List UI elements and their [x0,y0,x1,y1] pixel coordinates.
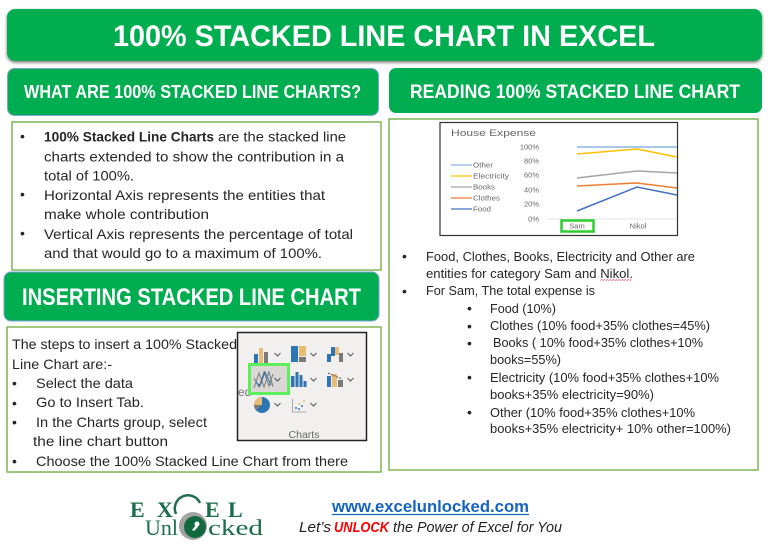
legend: Clothes [473,194,500,202]
tagline: Let’s [299,519,332,536]
definition bullets: • [20,128,25,144]
ribbon group label: Charts [289,429,319,441]
icon: combo chart [327,373,343,387]
step bullets: • [12,414,17,430]
step bullets: • [12,395,17,411]
ribbon screenshot: charts group [238,332,366,441]
tagline [299,519,563,536]
percent axis: 20% [524,200,539,208]
steps text [12,336,348,469]
reading text: Other (10% food+35% clothes+10% [490,405,695,420]
logo word: Unlocked: Unl [145,515,178,540]
definition text: total of 100%. [44,168,134,184]
chart: house expense [440,122,678,236]
reading text [426,249,731,436]
legend: Books [473,182,495,192]
legend: Electricity [473,172,509,180]
definition bullets: • [20,225,25,241]
reading text: Food (10%) [490,301,556,316]
icon: scatter chart [292,399,306,412]
heading: what are 100% stacked line charts [8,68,378,116]
definition text: Vertical Axis represents the percentage of total [44,226,353,242]
reading text: Books ( 10% food+35% clothes+10% [493,335,703,350]
chart title: House Expense [451,128,536,139]
definition bullets [20,128,25,241]
panel: reading the chart [389,119,758,470]
reading text: books+35% electricity=90%) [490,387,654,402]
step bullets: • [12,453,17,469]
heading: inserting stacked line chart: INSERTING STACKED LINE CHART [22,284,361,311]
category labels: Nikol [630,222,647,230]
steps text: Go to Insert Tab. [36,394,144,410]
percent axis [520,142,539,224]
definition text: charts extended to show the contribution in a [44,148,344,164]
steps text: Select the data [36,375,133,391]
definition text: Horizontal Axis represents the entities that [44,187,325,203]
logo word: EXCEL: L [228,497,243,522]
reading text: For Sam, The total expense is [426,283,595,298]
steps text: Choose the 100% Stacked Line Chart from there [36,453,348,469]
reading bullets: • [402,248,407,264]
icon: treemap [291,346,306,362]
steps text: Line Chart are:- [12,356,112,372]
icon: column chart [254,348,268,363]
website link: www.excelunlocked.com [331,497,529,516]
logo word: EXCEL: X [157,497,173,522]
icon: bar chart [291,372,306,387]
definition text: are the stacked line [218,128,346,144]
icon: pie chart [254,397,270,413]
reading text: books=55%) [490,352,561,367]
reading bullets: • [467,335,472,351]
definition text: make whole contribution [44,206,209,222]
logo word: EXCEL: E [130,497,145,522]
logo word: EXCEL: E [205,497,220,522]
logo word: Unlocked [145,515,263,540]
heading: reading 100% stacked line chart: READING 100% STACKED LINE CHART [410,82,740,103]
logo word: EXCEL [130,497,243,522]
percent axis: 0% [528,214,539,224]
panel: definition [12,122,381,270]
title banner: 100% STACKED LINE CHART IN EXCEL [113,20,655,53]
logo: Excel Unlocked [130,495,263,540]
step bullets: • [12,375,17,391]
reading bullets: • [467,369,472,385]
stray ribbon letters: ed [238,385,251,399]
percent axis: 100% [520,142,539,152]
tagline: UNLOCK [334,519,390,536]
icon: highlighted line chart button [250,364,288,394]
legend [451,160,509,214]
reading bullets: • [467,404,472,420]
reading bullets [402,248,472,420]
heading: reading 100% stacked line chart [389,68,762,113]
steps text: the line chart button [33,433,168,449]
percent axis: 60% [524,170,539,180]
reading text: books+35% electricity+ 10% other=100%) [490,421,731,436]
reading text: Food, Clothes, Books, Electricity and Other are [426,249,695,264]
reading text: entities for category Sam and Nikol. [426,266,633,281]
reading bullets: • [467,318,472,334]
percent axis: 80% [524,156,539,166]
logo word: Unlocked: cked [208,515,263,540]
reading text: Electricity (10% food+35% clothes+10% [490,370,719,385]
step bullets [12,375,17,469]
tagline: the Power of Excel for You [393,519,563,536]
category labels: Sam [569,222,585,230]
heading: inserting stacked line chart [4,272,379,321]
icon: waterfall [327,347,343,362]
dropdown chevrons [274,353,354,406]
legend: Food [473,204,491,214]
heading: what are 100% stacked line charts: WHAT ARE 100% STACKED LINE CHARTS? [24,82,361,102]
logo shackle [175,495,200,514]
panel: steps [7,327,381,472]
legend: Other [473,160,494,170]
reading bullets: • [402,283,407,299]
title banner [7,9,762,61]
reading text: Clothes (10% food+35% clothes=45%) [490,318,710,333]
highlight box on Sam [562,220,594,232]
definition text [44,128,353,261]
line series [577,147,677,211]
definition text: and that would go to a maximum of 100%. [44,245,322,261]
definition bullets: • [20,186,25,202]
steps text: In the Charts group, select [36,414,207,430]
percent axis: 40% [524,186,539,194]
reading bullets: • [467,300,472,316]
logo lock [179,512,207,540]
steps text: The steps to insert a 100% Stacked [12,336,237,352]
category labels [569,222,647,230]
definition text: 100% Stacked Line Charts [44,128,214,144]
